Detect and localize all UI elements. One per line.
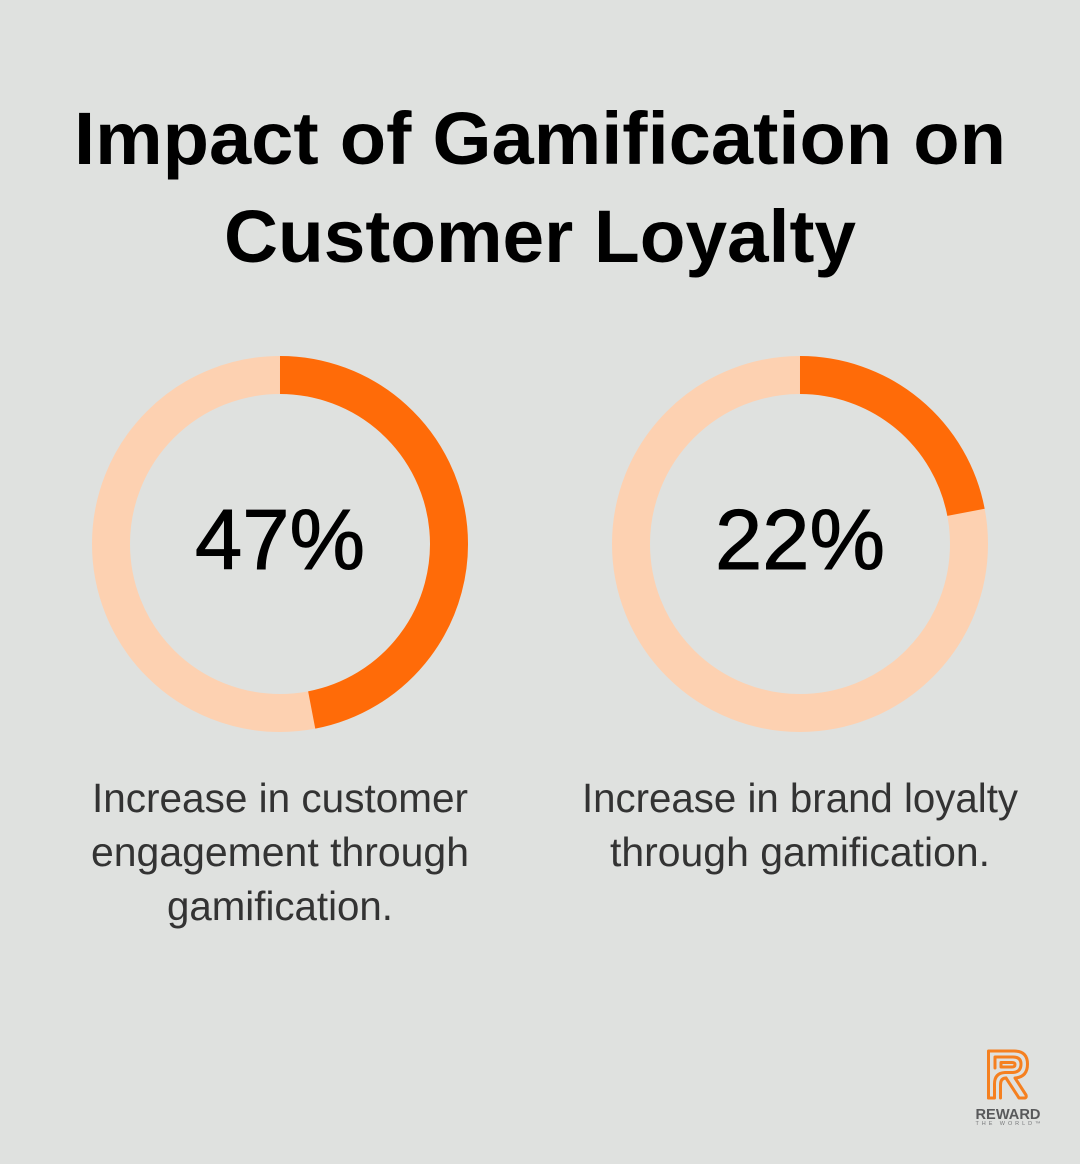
title: Customer Loyalty — [224, 195, 856, 278]
caption: 47%: gamification. — [167, 883, 393, 929]
donut chart: 47%: 47% — [195, 493, 365, 588]
title: Impact of Gamification on — [74, 97, 1006, 180]
donut chart: 22% — [631, 375, 969, 713]
donut chart: 47% — [111, 375, 449, 713]
caption: 47%: Increase in customer — [92, 775, 468, 821]
caption: 22%: through gamification. — [610, 829, 990, 875]
caption: 22%: Increase in brand loyalty — [582, 775, 1018, 821]
donut chart: 22%: 22% — [715, 493, 885, 588]
icon: R mark — [988, 1051, 1028, 1098]
logo: Reward the World: REWARD — [976, 1107, 1040, 1123]
caption: 22% — [582, 775, 1018, 875]
logo: Reward the World: THE WORLD™ — [976, 1121, 1040, 1127]
logo: Reward the World — [976, 1051, 1040, 1127]
title — [74, 97, 1006, 278]
caption: 47%: engagement through — [91, 829, 469, 875]
caption: 47% — [91, 775, 469, 929]
